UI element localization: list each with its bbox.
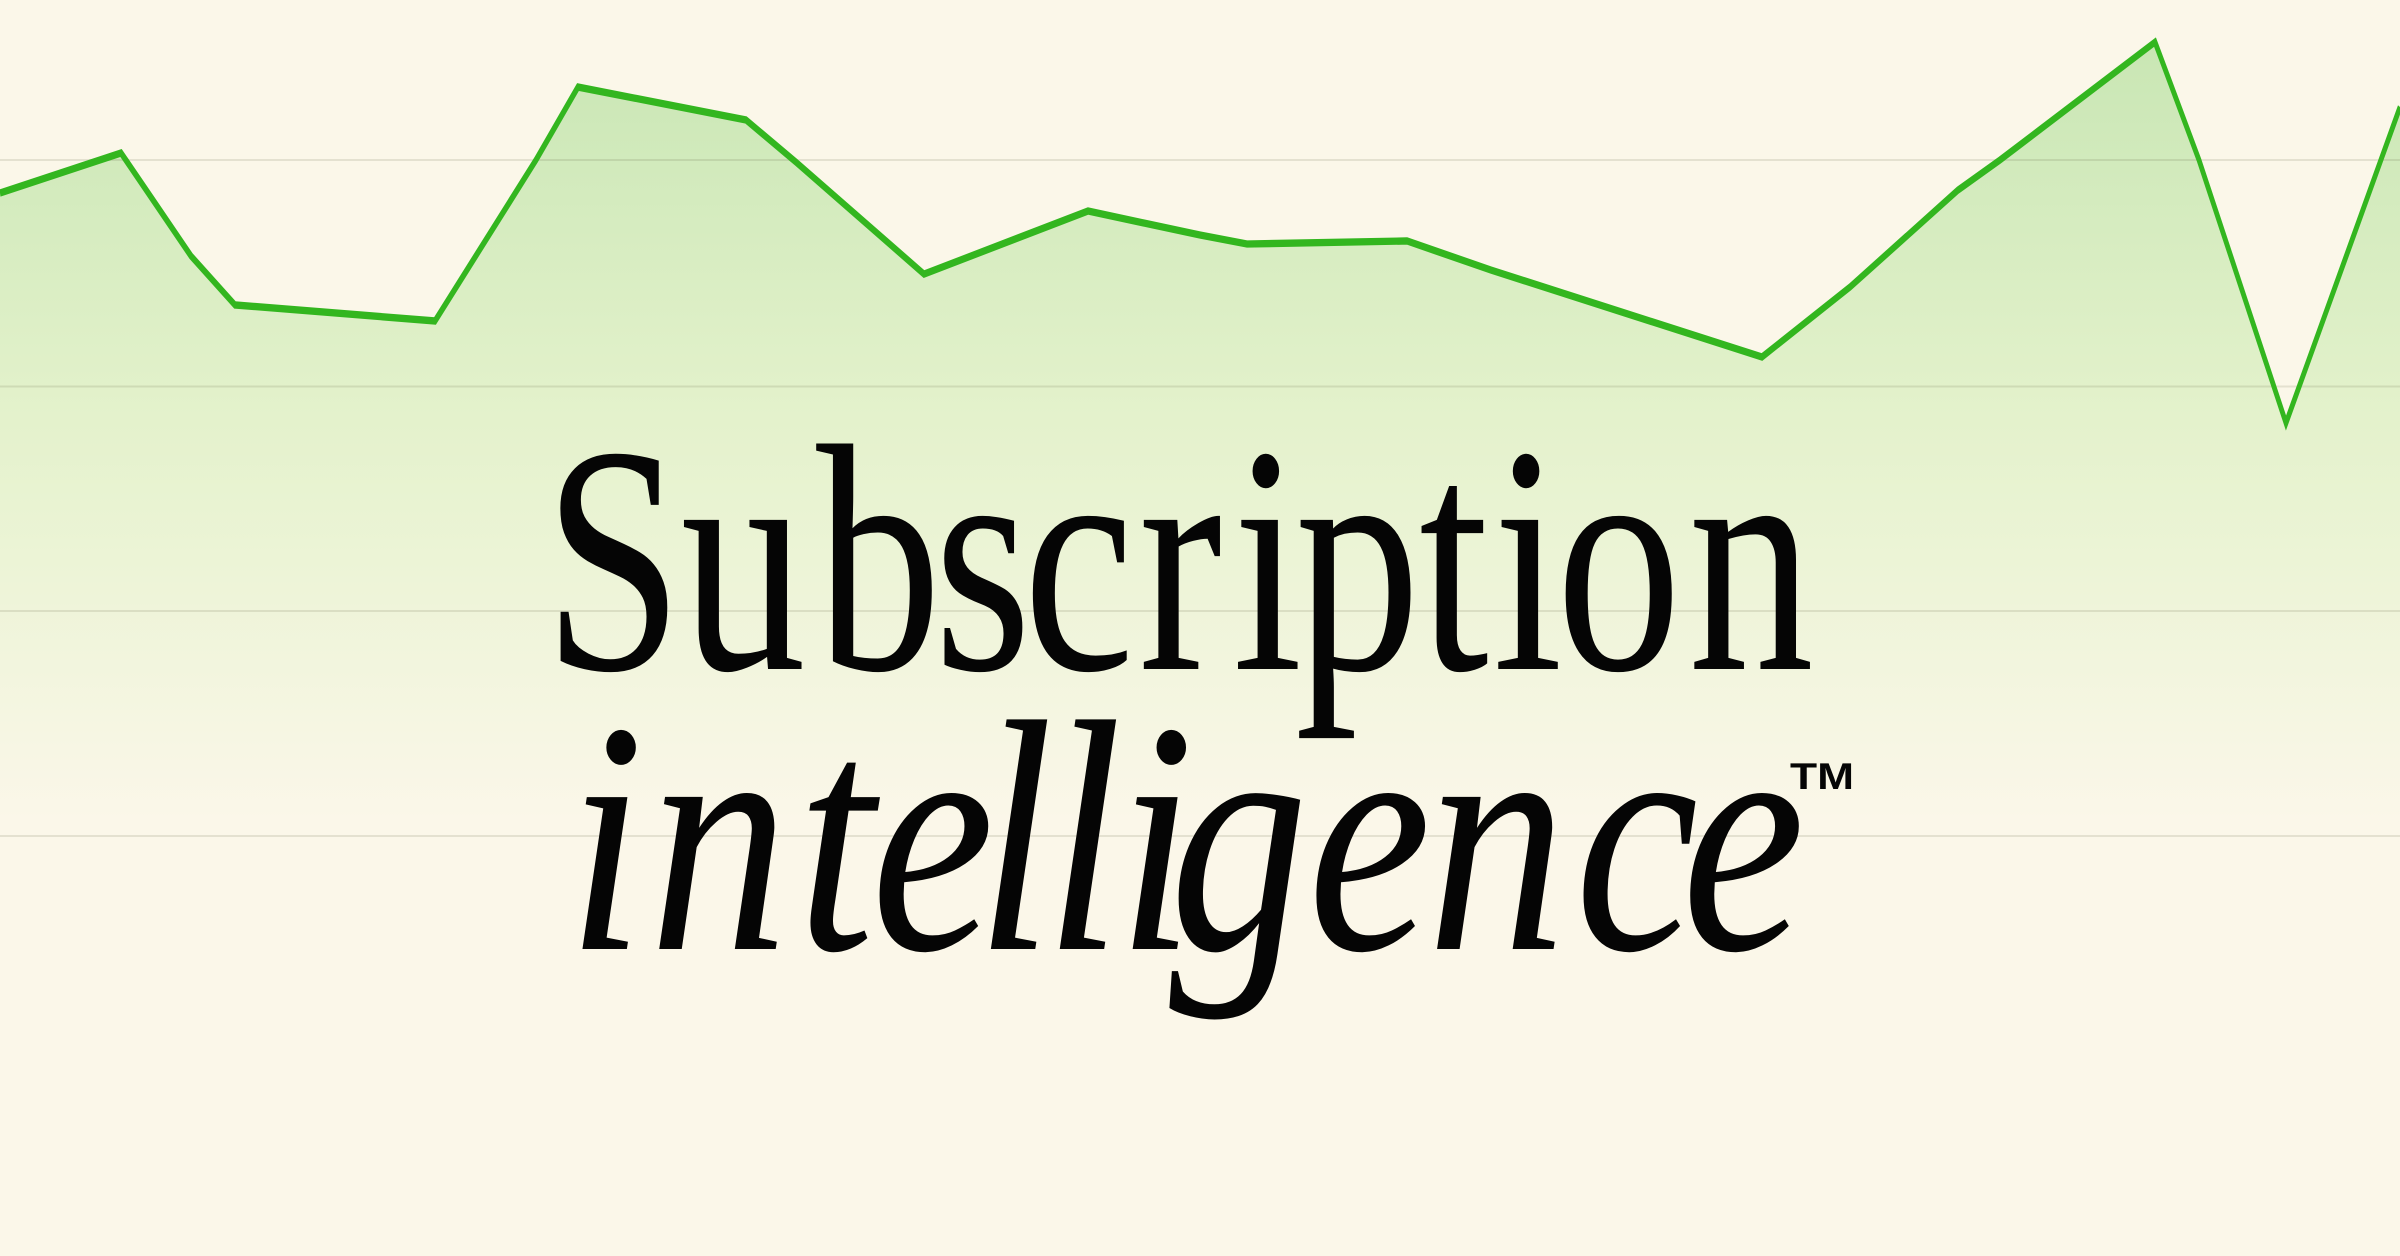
area chart fill [0,42,2400,830]
title: Subscription: Subscription [544,380,1814,740]
area chart line [0,42,2400,423]
horizontal grid lines [0,160,2400,836]
title: intelligence: intelligence [567,656,1805,1022]
trademark mark: TM [1790,756,1854,797]
